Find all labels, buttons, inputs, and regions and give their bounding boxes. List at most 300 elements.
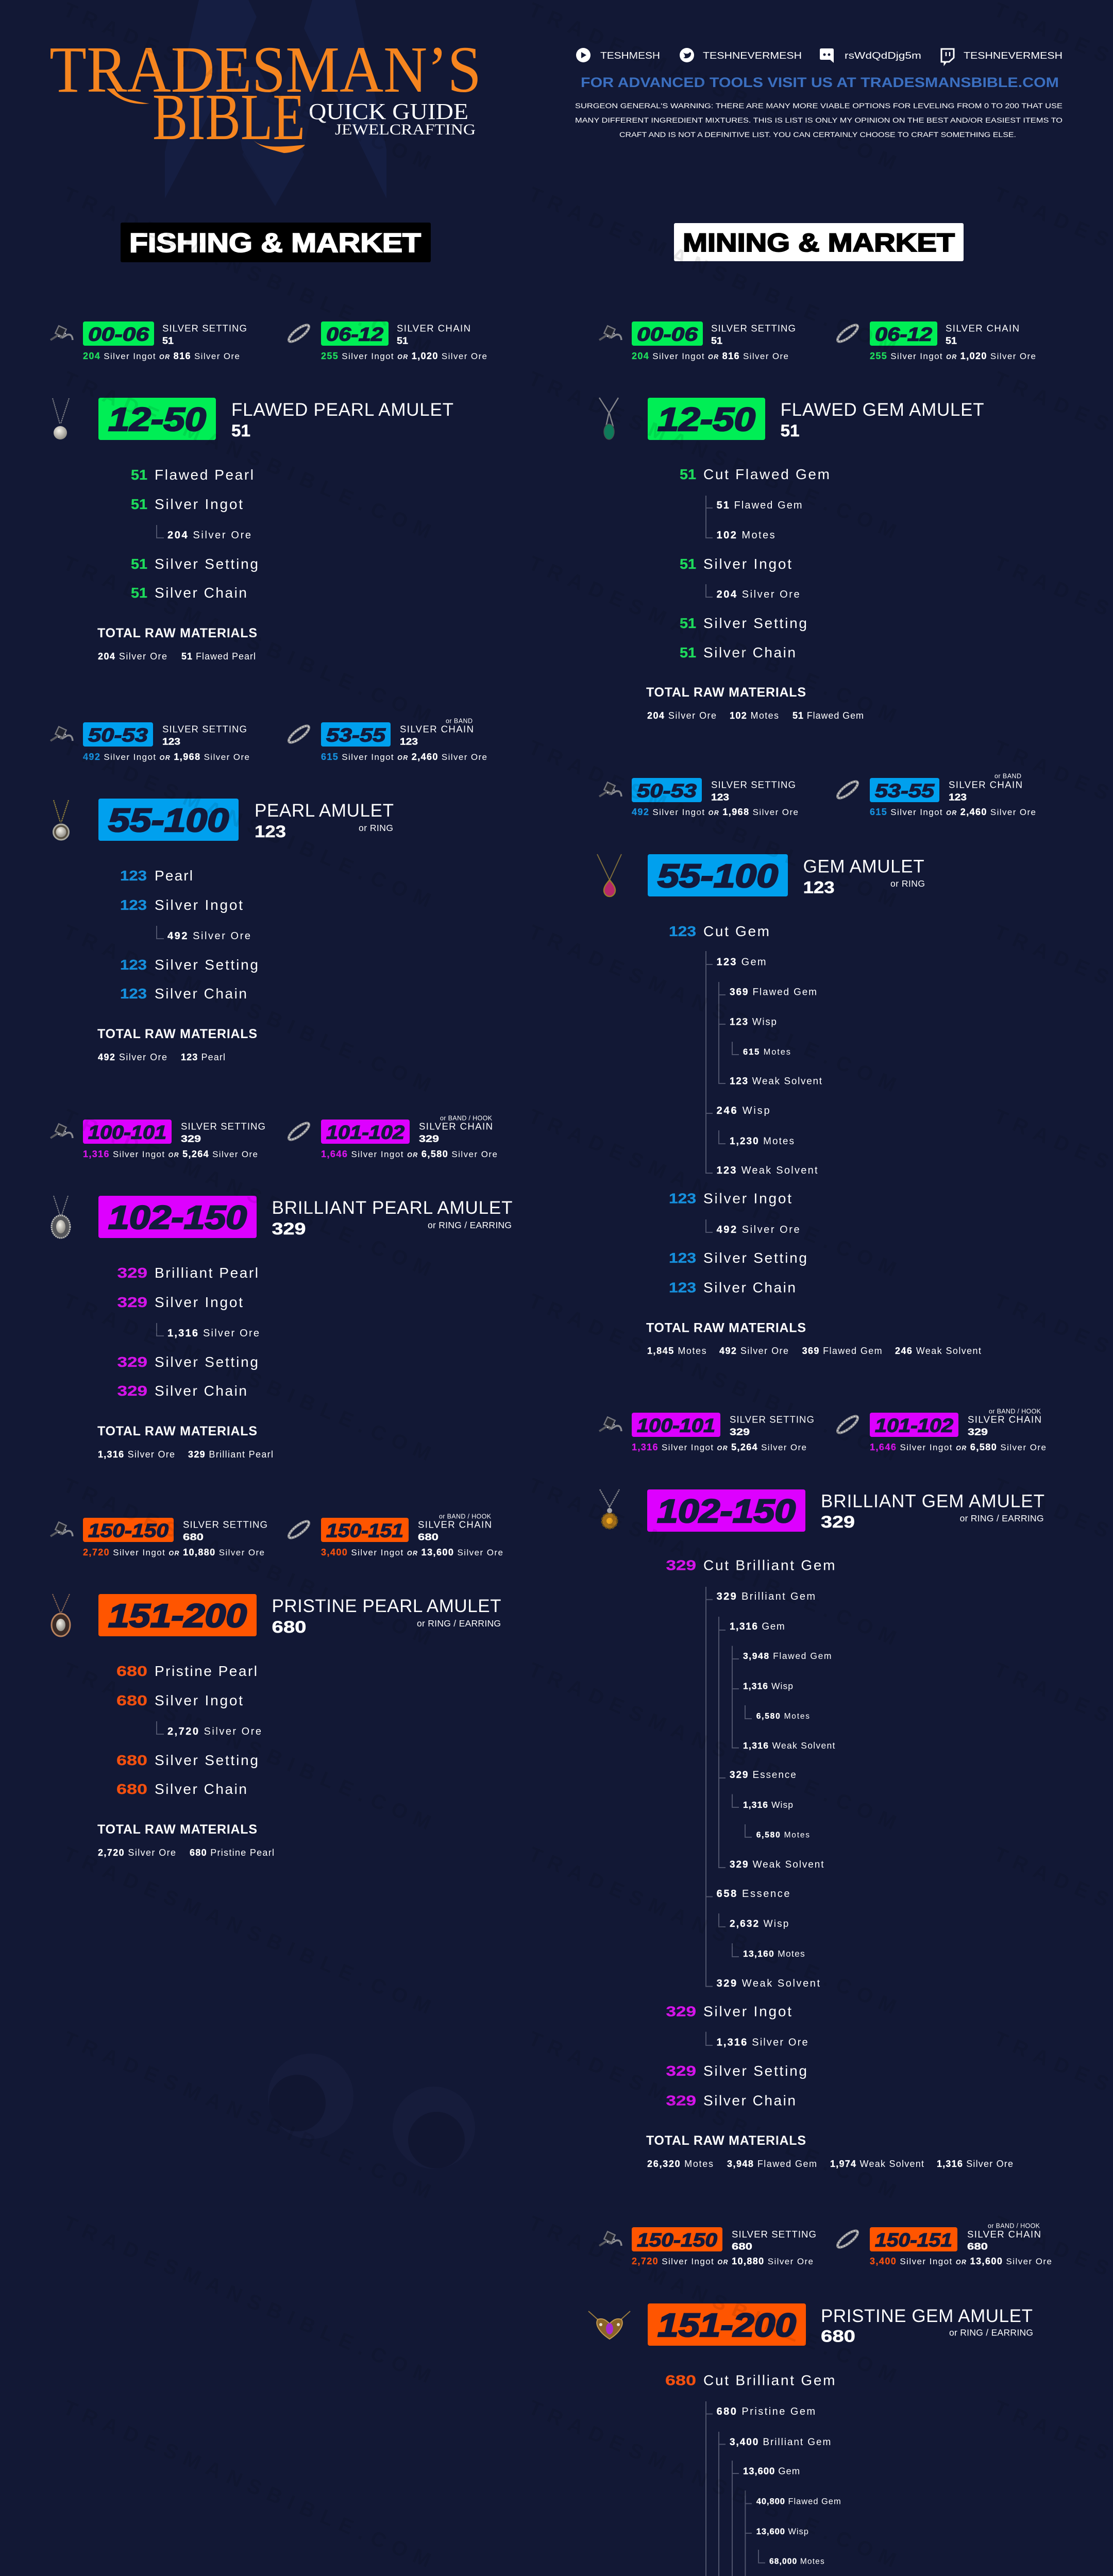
silver setting 100-101: 1,316 Silver Ingot OR 5,264 Silver Ore — [632, 1442, 806, 1452]
silver setting 50-53 — [50, 722, 249, 762]
ingredient list: 680 — [116, 1752, 147, 1768]
level badge 55-100: 55-100 — [657, 857, 778, 894]
item title: or RING — [359, 823, 393, 833]
total raw materials: TOTAL RAW MATERIALS — [646, 685, 806, 700]
silver setting 00-06 — [599, 321, 796, 361]
ingredient tree: 51 — [680, 466, 696, 482]
silver setting 100-101: 1,316 Silver Ingot OR 5,264 Silver Ore — [83, 1149, 258, 1159]
silver chain 101-102: 101-102 — [326, 1122, 404, 1143]
ingredient tree: 658 Essence — [717, 1888, 789, 1900]
icon: pristine pearl necklace — [52, 1594, 70, 1636]
ingredient tree: Cut Flawed Gem — [703, 466, 830, 482]
silver setting 150-150: SILVER SETTING — [183, 1519, 267, 1530]
silver chain 150-151 — [286, 1513, 503, 1557]
silver chain 101-102: 101-102 — [875, 1415, 953, 1436]
ingredient list: 680 — [116, 1781, 147, 1797]
item title — [803, 856, 925, 896]
background emblem — [165, 0, 386, 206]
panel: fishing 151-200 — [50, 1513, 503, 1858]
item title: 123 — [255, 822, 286, 841]
silver chain 06-12 — [835, 321, 1036, 361]
ingredient tree: 13,600 Wisp — [756, 2527, 808, 2536]
silver setting 50-53: 492 Silver Ingot OR 1,968 Silver Ore — [632, 807, 798, 817]
silver setting 50-53: SILVER SETTING — [711, 779, 796, 790]
heading: mining and market — [674, 223, 964, 261]
ingredient tree: 492 Silver Ore — [717, 1224, 800, 1235]
ingredient tree: Silver Ingot — [703, 556, 791, 572]
social links: rsWdQdDjg5m — [845, 50, 921, 61]
silver setting 50-53 — [599, 778, 798, 817]
total raw materials — [97, 1027, 257, 1062]
silver setting 50-53: 50-53 — [88, 724, 148, 746]
social links: TESHNEVERMESH — [703, 50, 802, 61]
item title: GEM AMULET — [803, 856, 924, 877]
ingredient list: Silver Chain — [155, 986, 247, 1002]
total raw materials: TOTAL RAW MATERIALS — [646, 1321, 806, 1335]
total raw materials: 204 Silver Ore — [98, 651, 167, 662]
total raw materials: 492 Silver Ore — [719, 1346, 788, 1356]
ingredient tree: 329 Essence — [730, 1770, 796, 1781]
ingredient tree: 123 Weak Solvent — [730, 1076, 822, 1087]
ingredient tree: 1,316 Weak Solvent — [743, 1740, 835, 1751]
ingredient tree: 3,400 Brilliant Gem — [730, 2437, 831, 2448]
silver chain 53-55: SILVER CHAIN — [949, 779, 1022, 790]
panel: mining 151-200 — [588, 2223, 1052, 2576]
item title: 123 — [803, 878, 835, 896]
silver setting 50-53: 123 — [711, 791, 729, 803]
ingredient tree — [666, 1557, 835, 2109]
total raw materials: 1,974 Weak Solvent — [830, 2159, 924, 2169]
ingredient tree: 68,000 Motes — [769, 2557, 824, 2566]
panel: mining 12-50 — [599, 321, 1036, 721]
surgeon general warning: SURGEON GENERAL'S WARNING: THERE ARE MANY MORE VIABLE OPTIONS FOR LEVELING FROM 0 TO 200 THAT USE — [575, 102, 1063, 110]
total raw materials: TOTAL RAW MATERIALS — [97, 626, 257, 640]
background skull — [268, 2054, 475, 2169]
level badge 151-200: 151-200 — [108, 1597, 247, 1634]
item title: 680 — [272, 1618, 306, 1636]
item title — [272, 1198, 512, 1238]
total raw materials: TOTAL RAW MATERIALS — [646, 2133, 806, 2148]
ingredient tree: Silver Ingot — [703, 1191, 791, 1207]
silver chain 53-55: SILVER CHAIN — [400, 723, 474, 735]
item title: or RING / EARRING — [417, 1618, 501, 1629]
total raw materials: 1,316 Silver Ore — [98, 1449, 175, 1460]
ingredient tree: 329 — [666, 1557, 696, 1573]
item title: FLAWED GEM AMULET — [781, 400, 984, 420]
silver chain 06-12: SILVER CHAIN — [946, 323, 1019, 334]
total raw materials — [646, 2133, 1013, 2169]
silver setting 00-06: 00-06 — [637, 324, 698, 345]
ingredient tree: 40,800 Flawed Gem — [756, 2497, 841, 2506]
ingredient tree: 51 — [680, 645, 696, 660]
ingredient list: 51 — [131, 556, 147, 572]
total raw materials: TOTAL RAW MATERIALS — [97, 1424, 257, 1438]
ingredient tree: 2,632 Wisp — [730, 1919, 788, 1929]
level badge 12-50: 12-50 — [108, 401, 206, 438]
silver chain 06-12: 51 — [946, 335, 957, 346]
item title — [231, 400, 453, 440]
icon: green gem necklace — [599, 398, 618, 439]
ingredient tree: Silver Setting — [703, 615, 807, 631]
silver chain 150-151: or BAND / HOOK — [988, 2223, 1040, 2230]
item title: or RING / EARRING — [428, 1220, 512, 1230]
total raw materials: 3,948 Flawed Gem — [727, 2159, 817, 2169]
silver chain 06-12: 255 Silver Ingot OR 1,020 Silver Ore — [321, 351, 487, 361]
ingredient tree: 680 Pristine Gem — [717, 2406, 815, 2417]
silver setting 50-53: 492 Silver Ingot OR 1,968 Silver Ore — [83, 752, 249, 762]
total raw materials: 1,316 Silver Ore — [937, 2159, 1013, 2169]
title logo: BIBLE — [153, 80, 305, 154]
silver chain 150-151: 680 — [418, 1531, 439, 1543]
level badge 102-150 — [98, 1196, 257, 1238]
ingredient tree: 51 — [680, 556, 696, 572]
total raw materials — [97, 1424, 273, 1460]
ingredient tree: 123 Gem — [717, 956, 766, 968]
heading: fishing and market: FISHING & MARKET — [129, 228, 421, 258]
silver chain 53-55: 53-55 — [326, 724, 386, 746]
item title: 329 — [821, 1513, 855, 1531]
item title: or RING / EARRING — [960, 1513, 1044, 1523]
ingredient list: 51 — [131, 496, 147, 512]
ingredient tree: 123 Weak Solvent — [717, 1165, 818, 1176]
silver setting 150-150: 2,720 Silver Ingot OR 10,880 Silver Ore — [83, 1547, 264, 1557]
ingredient tree: 1,316 Wisp — [743, 1800, 793, 1810]
ingredient list: 329 — [117, 1383, 147, 1399]
ingredient tree: Cut Brilliant Gem — [703, 2372, 835, 2388]
silver setting 100-101: 100-101 — [88, 1122, 166, 1143]
level badge 12-50 — [648, 398, 765, 440]
surgeon general warning — [575, 102, 1063, 139]
ingredient list: 329 — [117, 1265, 147, 1281]
total raw materials — [97, 1822, 274, 1858]
silver chain 53-55: or BAND — [446, 717, 473, 724]
level badge 55-100: 55-100 — [108, 802, 229, 839]
social links: TESHMESH — [600, 50, 660, 61]
ingredient list: Silver Setting — [155, 1354, 258, 1370]
silver chain 150-151: 3,400 Silver Ingot OR 13,600 Silver Ore — [870, 2256, 1052, 2266]
website callout: FOR ADVANCED TOOLS VISIT US AT TRADESMANSBIBLE.COM — [581, 75, 1059, 90]
silver chain 53-55: 615 Silver Ingot OR 2,460 Silver Ore — [870, 807, 1036, 817]
ingredient tree: Silver Chain — [703, 645, 796, 660]
level badge 12-50 — [98, 398, 216, 440]
icon: brilliant pearl necklace — [52, 1196, 70, 1238]
item title: PRISTINE GEM AMULET — [821, 2306, 1033, 2326]
ingredient tree: 329 Brilliant Gem — [717, 1591, 815, 1602]
silver chain 101-102: 1,646 Silver Ingot OR 6,580 Silver Ore — [321, 1149, 497, 1159]
ingredient tree: 329 Weak Solvent — [717, 1978, 820, 1989]
silver chain 150-151: 680 — [967, 2241, 988, 2251]
level badge 12-50: 12-50 — [657, 401, 755, 438]
total raw materials: TOTAL RAW MATERIALS — [97, 1822, 257, 1837]
silver setting 00-06: SILVER SETTING — [711, 323, 796, 334]
panel: fishing 12-50 — [50, 321, 487, 662]
ingredient list: 123 — [120, 986, 147, 1002]
ingredient list — [120, 868, 258, 1002]
title logo: QUICK GUIDE — [309, 99, 468, 124]
total raw materials: 51 Flawed Pearl — [181, 651, 256, 662]
ingredient list: 1,316 Silver Ore — [167, 1328, 259, 1339]
ingredient tree — [665, 2372, 845, 2576]
ingredient tree: 1,316 Wisp — [743, 1681, 793, 1691]
silver chain 101-102: 329 — [419, 1133, 439, 1144]
silver setting 100-101: 329 — [181, 1133, 201, 1144]
ingredient list: Silver Setting — [155, 556, 258, 572]
total raw materials: 329 Brilliant Pearl — [188, 1449, 273, 1460]
silver setting 150-150 — [50, 1518, 267, 1557]
ingredient tree: Silver Setting — [703, 1250, 807, 1266]
ingredient list: Silver Setting — [155, 1752, 258, 1768]
ingredient list: Silver Chain — [155, 585, 247, 601]
ingredient list: Silver Ingot — [155, 897, 243, 913]
silver chain 101-102: or BAND / HOOK — [989, 1408, 1041, 1415]
ingredient list: Pristine Pearl — [155, 1663, 257, 1679]
item title: PEARL AMULET — [255, 801, 394, 821]
silver chain 53-55 — [835, 773, 1036, 817]
icon: pearl necklace — [53, 398, 69, 439]
silver setting 00-06: 204 Silver Ingot OR 816 Silver Ore — [632, 351, 788, 361]
panel: mining 102-150 — [599, 1408, 1046, 2169]
total raw materials — [646, 1321, 981, 1356]
silver chain 150-151: or BAND / HOOK — [439, 1513, 492, 1520]
item title: BRILLIANT PEARL AMULET — [272, 1198, 512, 1218]
silver setting 50-53: 50-53 — [637, 780, 697, 802]
total raw materials: 246 Weak Solvent — [895, 1346, 981, 1356]
surgeon general warning: CRAFT AND IS NOT A DEFINITIVE LIST. YOU CAN CERTAINLY CHOOSE TO CRAFT SOMETHING ELSE. — [619, 131, 1016, 139]
silver setting 150-150: 680 — [732, 2241, 752, 2251]
ingredient tree: 3,948 Flawed Gem — [743, 1651, 832, 1661]
silver chain 53-55: 615 Silver Ingot OR 2,460 Silver Ore — [321, 752, 487, 762]
silver chain 101-102: or BAND / HOOK — [440, 1115, 493, 1122]
silver chain 06-12: 255 Silver Ingot OR 1,020 Silver Ore — [870, 351, 1036, 361]
ingredient tree: 329 — [666, 2003, 696, 2020]
silver chain 101-102: SILVER CHAIN — [419, 1121, 493, 1131]
total raw materials: 492 Silver Ore — [98, 1052, 167, 1062]
silver setting 100-101: 100-101 — [637, 1415, 715, 1436]
silver chain 06-12: 51 — [397, 335, 408, 346]
item title: 329 — [272, 1219, 306, 1238]
ingredient list: 123 — [120, 897, 147, 913]
total raw materials: 26,320 Motes — [647, 2159, 713, 2169]
silver setting 150-150: 150-150 — [88, 1520, 168, 1541]
silver setting 100-101 — [50, 1120, 265, 1159]
ingredient tree: 246 Wisp — [717, 1105, 770, 1116]
ingredient tree — [669, 923, 822, 1295]
total raw materials: 51 Flawed Gem — [792, 710, 864, 721]
ingredient list: Brilliant Pearl — [155, 1265, 258, 1281]
silver setting 00-06: 00-06 — [88, 324, 149, 345]
ingredient list: 492 Silver Ore — [167, 930, 250, 942]
total raw materials: 369 Flawed Gem — [802, 1346, 882, 1356]
item title — [781, 400, 984, 440]
ingredient tree: 51 Flawed Gem — [717, 500, 802, 511]
silver chain 150-151: 150-151 — [875, 2230, 952, 2250]
ingredient list: 329 — [117, 1294, 147, 1310]
level badge 151-200 — [98, 1594, 257, 1636]
item title: PRISTINE PEARL AMULET — [272, 1596, 501, 1616]
silver setting 100-101: SILVER SETTING — [730, 1414, 814, 1425]
level badge 102-150: 102-150 — [108, 1199, 247, 1236]
silver setting 150-150: SILVER SETTING — [732, 2229, 816, 2240]
icon: pristine gem necklace — [588, 2311, 630, 2339]
icon: amber necklace — [600, 1489, 619, 1529]
ingredient tree: 680 — [665, 2372, 696, 2388]
ingredient tree — [680, 466, 830, 660]
ingredient list: 123 — [120, 868, 147, 884]
ingredient list: 329 — [117, 1354, 147, 1370]
ingredient tree: Cut Brilliant Gem — [703, 1557, 835, 1573]
ingredient tree: Silver Chain — [703, 2093, 796, 2109]
silver setting 00-06: 51 — [162, 335, 174, 346]
ingredient list: 51 — [131, 467, 147, 483]
item title — [272, 1596, 501, 1636]
icon: ruby necklace — [597, 854, 621, 896]
silver chain 06-12 — [286, 321, 487, 361]
ingredient tree: 6,580 Motes — [756, 1712, 810, 1721]
ingredient list: Silver Ingot — [155, 1294, 243, 1310]
ingredient list: Pearl — [155, 868, 193, 884]
total raw materials — [646, 685, 864, 721]
silver chain 150-151 — [835, 2223, 1052, 2266]
ingredient tree: 1,230 Motes — [730, 1136, 794, 1147]
silver setting 50-53: 123 — [162, 736, 180, 747]
total raw materials: 2,720 Silver Ore — [98, 1848, 176, 1858]
silver chain 101-102: 1,646 Silver Ingot OR 6,580 Silver Ore — [870, 1442, 1046, 1452]
silver setting 00-06: 204 Silver Ingot OR 816 Silver Ore — [83, 351, 240, 361]
level badge 102-150 — [647, 1489, 805, 1532]
total raw materials: 1,845 Motes — [647, 1346, 706, 1356]
silver chain 101-102 — [835, 1408, 1046, 1452]
silver chain 150-151: 3,400 Silver Ingot OR 13,600 Silver Ore — [321, 1547, 503, 1557]
ingredient list: Silver Setting — [155, 957, 258, 973]
silver chain 53-55: or BAND — [994, 773, 1021, 780]
title logo: JEWELCRAFTING — [335, 121, 476, 138]
ingredient tree: 329 — [666, 2093, 696, 2109]
ingredient list: 204 Silver Ore — [167, 530, 251, 541]
title logo: TRADESMAN’S — [49, 33, 481, 106]
ingredient list: 123 — [120, 957, 147, 973]
ingredient tree: 51 — [680, 615, 696, 631]
level badge 151-200: 151-200 — [657, 2307, 796, 2344]
ingredient tree: 204 Silver Ore — [717, 589, 800, 600]
total raw materials: 102 Motes — [730, 710, 779, 721]
item title: BRILLIANT GEM AMULET — [821, 1491, 1044, 1512]
ingredient tree: 6,580 Motes — [756, 1831, 810, 1839]
panel: fishing 102-150 — [50, 1115, 512, 1460]
ingredient list: 680 — [116, 1663, 147, 1679]
icon: gold pearl necklace — [54, 800, 69, 840]
title logo — [49, 33, 481, 154]
silver chain 101-102: 329 — [968, 1426, 988, 1437]
level badge 102-150: 102-150 — [657, 1493, 796, 1530]
ingredient list — [131, 467, 258, 601]
ingredient list: 680 — [116, 1692, 147, 1708]
silver chain 06-12: 06-12 — [875, 324, 932, 345]
silver chain 53-55: 123 — [400, 736, 418, 747]
item title — [821, 1491, 1044, 1531]
item title: or RING / EARRING — [949, 2328, 1033, 2338]
ingredient tree: 615 Motes — [743, 1047, 790, 1057]
ingredient list — [117, 1265, 259, 1399]
total raw materials — [97, 626, 257, 662]
total raw materials: 680 Pristine Pearl — [190, 1848, 274, 1858]
silver setting 100-101 — [599, 1413, 814, 1452]
ingredient tree: 102 Motes — [717, 530, 775, 541]
ingredient tree: 329 — [666, 2063, 696, 2079]
silver chain 53-55: 123 — [949, 791, 967, 803]
item title: 51 — [781, 421, 800, 440]
total raw materials: 204 Silver Ore — [647, 710, 716, 721]
item title — [821, 2306, 1033, 2345]
panel: fishing 55-100 — [50, 717, 487, 1062]
silver chain 53-55 — [286, 717, 487, 762]
silver setting 50-53: SILVER SETTING — [162, 723, 247, 735]
ingredient tree: 123 — [669, 1280, 696, 1295]
silver setting 00-06: 51 — [711, 335, 722, 346]
ingredient tree: 123 — [669, 923, 696, 939]
silver setting 150-150: 150-150 — [637, 2230, 717, 2250]
silver setting 100-101: 329 — [730, 1426, 750, 1437]
ingredient tree: 329 Weak Solvent — [730, 1859, 824, 1870]
ingredient tree: 369 Flawed Gem — [730, 987, 817, 997]
social links: TESHNEVERMESH — [964, 50, 1063, 61]
ingredient tree: 1,316 Silver Ore — [717, 2037, 808, 2048]
item title: 680 — [821, 2327, 855, 2345]
ingredient list: Flawed Pearl — [155, 467, 254, 483]
heading: fishing and market — [121, 223, 431, 262]
ingredient tree: 123 — [669, 1191, 696, 1207]
total raw materials: 123 Pearl — [181, 1052, 225, 1062]
ingredient list — [116, 1663, 261, 1797]
item title: 51 — [231, 421, 250, 440]
item title: or RING — [890, 878, 925, 889]
ingredient list: 2,720 Silver Ore — [167, 1726, 261, 1737]
total raw materials: TOTAL RAW MATERIALS — [97, 1027, 257, 1041]
silver chain 101-102: SILVER CHAIN — [968, 1414, 1041, 1425]
silver chain 53-55: 53-55 — [875, 780, 935, 802]
silver chain 150-151: SILVER CHAIN — [967, 2229, 1041, 2240]
level badge 55-100 — [98, 799, 239, 841]
ingredient list: Silver Ingot — [155, 1692, 243, 1708]
silver chain 06-12: 06-12 — [326, 324, 383, 345]
silver chain 101-102 — [286, 1115, 497, 1159]
social links — [576, 48, 1063, 64]
silver setting 150-150: 680 — [183, 1531, 204, 1543]
silver chain 06-12: SILVER CHAIN — [397, 323, 470, 334]
item title — [255, 801, 394, 841]
ingredient tree: 1,316 Gem — [730, 1621, 785, 1632]
ingredient tree: 13,600 Gem — [743, 2466, 800, 2476]
panel: mining 55-100 — [597, 773, 1036, 1356]
ingredient list: 51 — [131, 585, 147, 601]
silver setting 150-150 — [599, 2227, 816, 2266]
silver chain 150-151: 150-151 — [326, 1520, 403, 1541]
silver setting 100-101: SILVER SETTING — [181, 1121, 265, 1131]
ingredient tree: Cut Gem — [703, 923, 769, 939]
ingredient list: Silver Chain — [155, 1383, 247, 1399]
silver setting 00-06 — [50, 321, 247, 361]
ingredient list: Silver Chain — [155, 1781, 247, 1797]
ingredient tree: 13,160 Motes — [743, 1948, 805, 1959]
ingredient tree: Silver Setting — [703, 2063, 807, 2079]
silver setting 00-06: SILVER SETTING — [162, 323, 247, 334]
silver setting 150-150: 2,720 Silver Ingot OR 10,880 Silver Ore — [632, 2256, 813, 2266]
item title: FLAWED PEARL AMULET — [231, 400, 453, 420]
level badge 55-100 — [648, 854, 788, 896]
level badge 151-200 — [648, 2303, 806, 2346]
surgeon general warning: MANY DIFFERENT INGREDIENT MIXTURES. THIS IS LIST IS ONLY MY OPINION ON THE BEST AND/OR EASIEST ITEMS TO — [575, 116, 1063, 124]
silver chain 150-151: SILVER CHAIN — [418, 1519, 492, 1530]
ingredient tree: Silver Ingot — [703, 2003, 791, 2020]
